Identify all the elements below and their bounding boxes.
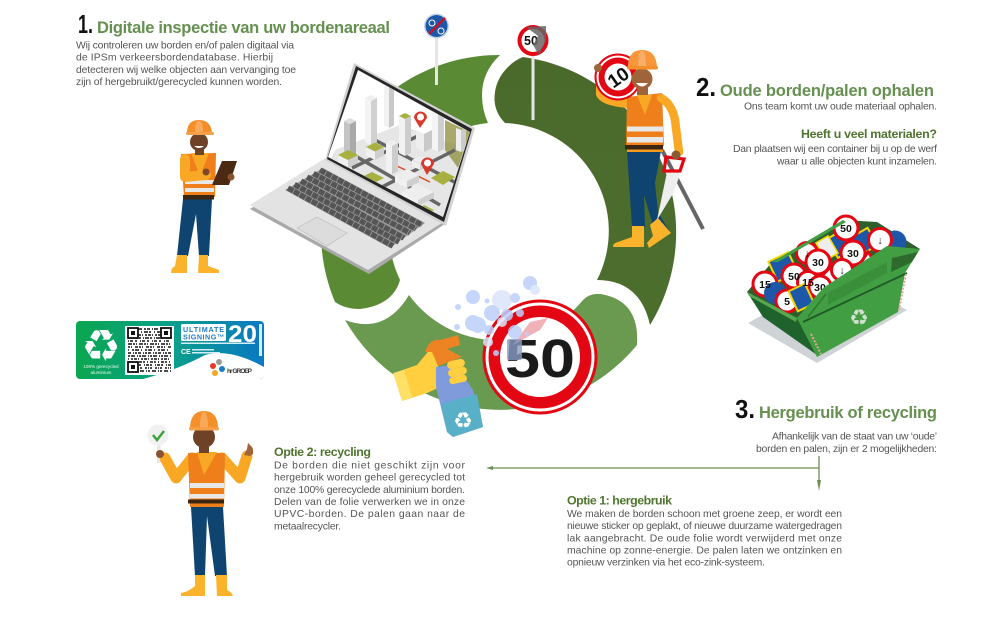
trackpad <box>297 217 347 246</box>
sign numbers: 15 <box>802 277 814 289</box>
step 1 text: zijn of hergebruikt/gerecycled kunnen worden. <box>76 77 282 88</box>
option 1 text: machine op zonne-energie. De palen laten we ontzinken en <box>567 546 842 556</box>
vest <box>627 148 663 152</box>
right arm <box>661 98 679 152</box>
road sign on pole: damaged 50 <box>518 25 548 120</box>
step 3 text: borden en palen, zijn er 2 mogelijkheden: <box>756 444 937 455</box>
big speed limit 50 sign being cleaned: 50 <box>505 329 575 389</box>
step 2 text: waar u alle objecten kunt inzamelen. <box>776 156 937 168</box>
option 2 text: UPVC-borden. De palen gaan naar de <box>274 509 465 520</box>
pole <box>662 150 703 229</box>
sticker caption: aluminium <box>91 370 112 375</box>
cleaned patch <box>513 318 548 345</box>
soap bubbles <box>454 276 540 356</box>
interior <box>747 220 920 318</box>
worker with clipboard <box>171 120 237 273</box>
option 2 text: onze 100% gerecyclede aluminium borden. <box>274 485 465 496</box>
step 2 heading: Oude borden/palen ophalen <box>720 82 934 100</box>
hr groep logo: hr GROEP <box>227 368 253 375</box>
sign numbers: 15 <box>759 279 771 291</box>
step 2 text: Heeft u veel materialen? <box>801 127 937 141</box>
worker with check sign and thumbs up <box>148 411 253 596</box>
step 2 heading <box>696 72 934 102</box>
option 1 text: Optie 1: hergebruik <box>567 494 672 508</box>
worker holding 10 sign with saw <box>594 50 703 248</box>
sign numbers <box>759 223 883 308</box>
worker holding 10 sign with saw: 10 <box>604 64 634 93</box>
sign numbers: ↓ <box>877 235 883 247</box>
check paddle <box>148 424 168 463</box>
sign numbers: ↓ <box>804 248 810 260</box>
helmet <box>628 50 657 67</box>
Ultimate Signing label: 20 <box>228 321 257 348</box>
bin left side <box>747 292 817 355</box>
step 3 text <box>756 432 937 455</box>
step 1 text <box>76 40 296 88</box>
step 2 heading: 2. <box>696 72 716 102</box>
big speed limit 50 sign being cleaned <box>454 276 598 414</box>
step 3 text: Afhankelijk van de staat van uw ‘oude’ <box>772 432 937 442</box>
bottle <box>436 365 483 437</box>
sign numbers: 5 <box>784 296 790 308</box>
recycle symbol: ♻ <box>81 321 121 372</box>
option 2 text: De borden die niet geschikt zijn voor <box>274 460 466 472</box>
sticker caption: 100% gerecycled <box>83 364 119 369</box>
option 2 text: Optie 2: recycling <box>274 445 371 459</box>
head <box>193 426 215 448</box>
keyboard <box>288 170 422 246</box>
recycle symbol: ♻ <box>453 409 473 434</box>
step 2 text <box>733 102 937 168</box>
raised arm <box>596 68 630 108</box>
step 1 text: detecteren wij welke objecten aan vervanging toe <box>76 65 296 76</box>
sticker caption <box>83 364 119 375</box>
step 1 text: de IPSm verkeersbordendatabase. Hierbij <box>76 52 273 64</box>
nozzle <box>425 335 462 366</box>
road sign on pole: damaged 50: 50 <box>524 34 538 48</box>
recycled aluminium sticker <box>76 321 264 379</box>
boots <box>181 575 233 596</box>
option 1 text: nieuwe sticker op geplakt, of nieuwe duurzame watergedragen <box>567 521 842 532</box>
ring segment: inspection <box>321 55 500 309</box>
legs and boots <box>627 151 670 232</box>
Ultimate Signing label: CE <box>181 349 191 356</box>
step 1 heading: 1. <box>78 9 93 39</box>
ring segment: collection <box>494 57 676 325</box>
option 2 text: metaalrecycler. <box>274 522 341 532</box>
glove <box>394 347 438 401</box>
option 1 text: opnieuw verzinken via het eco-zink-systeem. <box>567 558 765 568</box>
bin front side <box>797 246 920 357</box>
trousers <box>191 507 227 576</box>
map pins <box>414 111 427 128</box>
spray bottle held by yellow glove <box>393 335 483 437</box>
ring segment: reuse <box>345 294 637 410</box>
arms <box>165 456 247 478</box>
sign numbers: 50 <box>840 223 852 235</box>
fingers <box>446 358 468 385</box>
screen lid <box>325 63 475 226</box>
laptop base <box>250 160 445 274</box>
circular cycle ring <box>321 55 676 410</box>
road sign on pole: blue end-of-cycle-path <box>424 14 449 85</box>
helmet <box>190 411 218 429</box>
step 3 heading: Hergebruik of recycling <box>759 404 937 422</box>
sign numbers: 30 <box>847 248 859 260</box>
buildings <box>384 80 389 128</box>
head <box>637 86 648 95</box>
sign numbers: ↓ <box>839 265 845 277</box>
10 sign <box>594 54 642 100</box>
Ultimate Signing label: ULTIMATE <box>183 325 224 334</box>
step 1 text: Wij controleren uw borden en/of palen digitaal via <box>76 40 294 52</box>
QR code <box>125 326 174 375</box>
city <box>330 78 470 217</box>
laptop with 3D city map <box>250 63 475 274</box>
step 2 text: Ons team komt uw oude materiaal ophalen. <box>744 102 937 112</box>
sign numbers: 30 <box>814 282 826 294</box>
step 3 heading <box>735 394 937 424</box>
step 3 heading: 3. <box>735 394 755 424</box>
sign numbers: 30 <box>812 257 824 269</box>
vest <box>188 453 225 507</box>
option 2 text: Delen van de folie verwerken we in onze <box>274 497 465 508</box>
option 2 text: hergebruik worden geheel gerecycled tot <box>274 472 465 484</box>
step 1 heading: Digitale inspectie van uw bordenareaal <box>97 19 390 37</box>
option 2 text <box>274 445 466 532</box>
recycle symbol: ♻ <box>849 306 869 331</box>
saw <box>657 171 681 220</box>
option 1 text: lak aangebracht. De oude folie wordt verwijderd met onze <box>567 534 842 544</box>
Ultimate Signing label: SIGNING™ <box>183 332 224 342</box>
option 1 text: We maken de borden schoon met groene zeep, er wordt een <box>567 509 842 520</box>
option 1 text <box>567 494 842 568</box>
step 2 text: Dan plaatsen wij een container bij u op de werf <box>733 144 937 155</box>
shadow <box>748 296 907 363</box>
signs <box>753 216 906 312</box>
arrows to options <box>486 456 821 491</box>
step 1 heading <box>78 9 390 39</box>
green container full of signs <box>747 216 920 363</box>
hr groep logo <box>210 359 253 376</box>
Ultimate Signing label <box>181 321 262 356</box>
sign numbers: 50 <box>788 271 800 283</box>
